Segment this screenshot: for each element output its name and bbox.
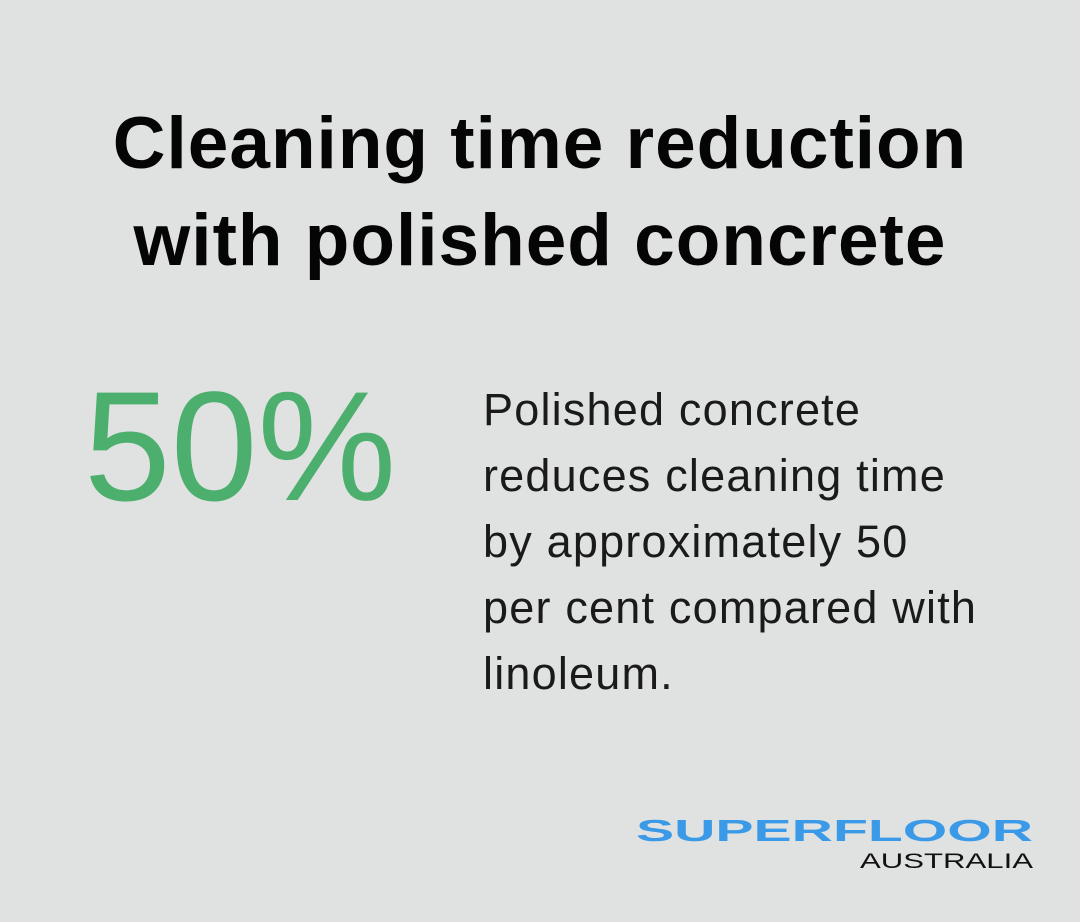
description text: reduces cleaning time — [483, 450, 946, 501]
big stat: 50% — [84, 360, 396, 534]
logo: AUSTRALIA — [860, 850, 1033, 873]
logo — [636, 813, 1033, 873]
description text — [483, 384, 977, 699]
description text: Polished concrete — [483, 384, 861, 435]
description text: per cent compared with — [483, 582, 977, 633]
title: with polished concrete — [134, 200, 946, 281]
title — [113, 103, 967, 281]
description text: linoleum. — [483, 648, 674, 699]
title: Cleaning time reduction — [113, 103, 967, 184]
logo: SUPERFLOOR — [636, 813, 1033, 848]
description text: by approximately 50 — [483, 516, 909, 567]
